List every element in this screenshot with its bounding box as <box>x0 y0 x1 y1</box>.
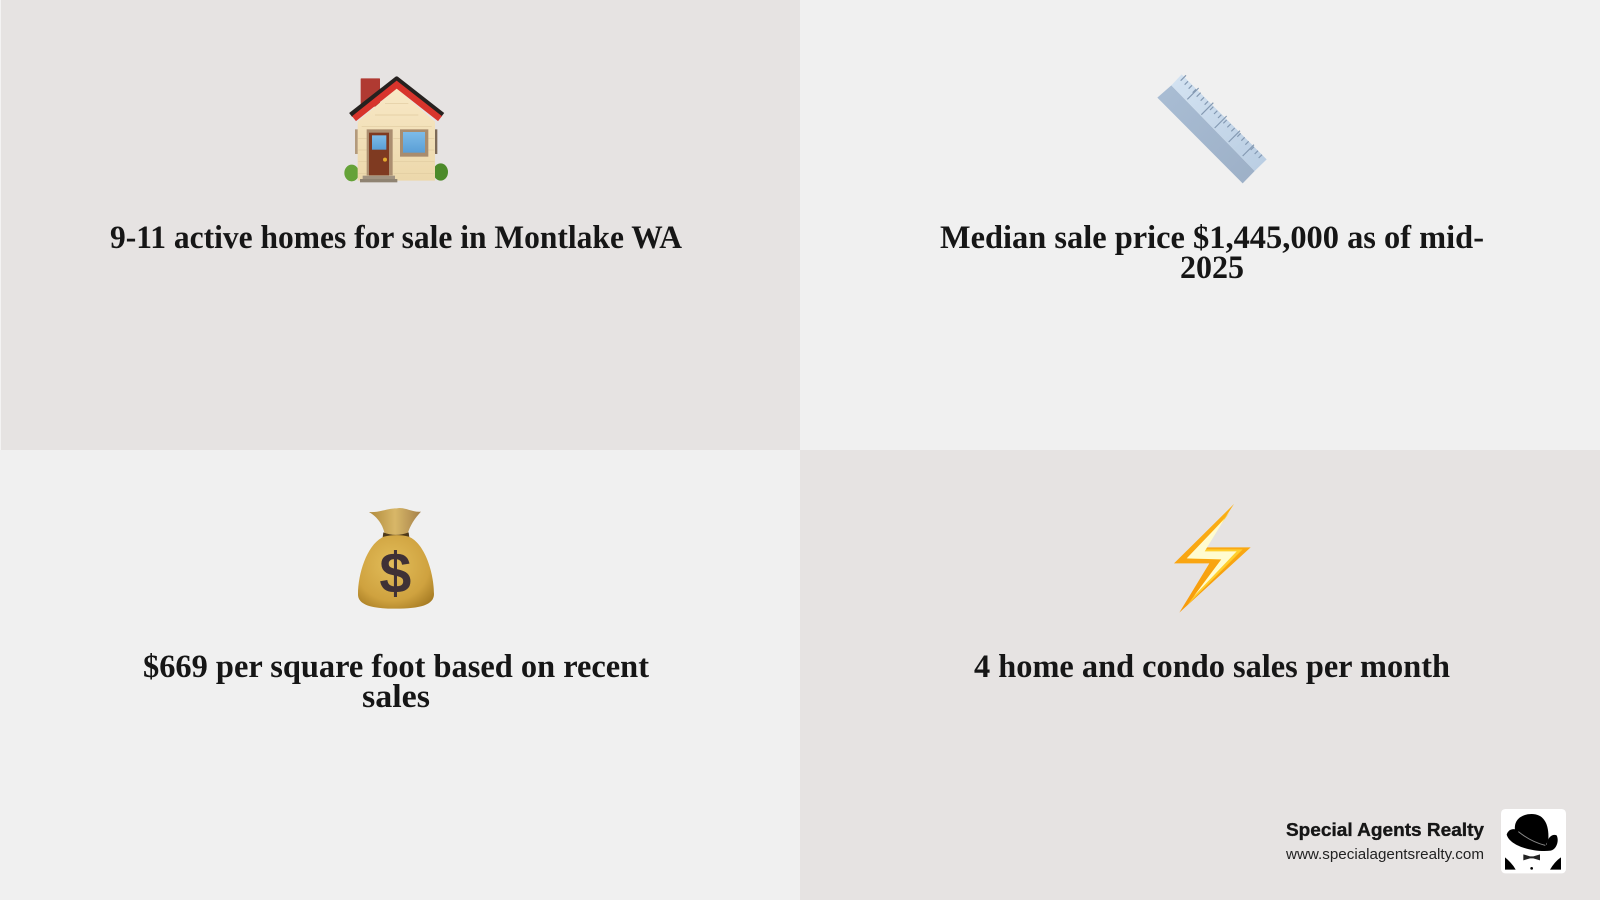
icon: money bag <box>358 508 434 609</box>
icon: house <box>344 78 448 182</box>
heading: price per square foot <box>143 649 649 715</box>
heading: median sale price: Median sale price $1,445,000 as of mid- <box>940 220 1484 256</box>
heading: median sale price: 2025 <box>1180 250 1244 286</box>
brand website: www.specialagentsrealty.com <box>1285 847 1484 863</box>
logo: bowler hat and bow tie <box>1501 809 1566 873</box>
heading: active homes: 9-11 active homes for sale in Montlake WA <box>110 220 682 256</box>
heading: monthly sales: 4 home and condo sales per month <box>974 649 1450 685</box>
panel: active homes <box>0 0 800 450</box>
panel: monthly sales <box>800 450 1600 900</box>
brand block <box>1285 809 1566 873</box>
heading: price per square foot: $669 per square foot based on recent <box>143 649 649 685</box>
panel: price per square foot <box>0 450 800 900</box>
icon: ruler <box>1157 74 1267 183</box>
panel: median sale price <box>800 0 1600 450</box>
heading: median sale price <box>940 220 1484 286</box>
brand name: Special Agents Realty <box>1286 819 1485 840</box>
icon: money bag: $ <box>379 541 411 605</box>
icon: lightning bolt <box>1174 504 1251 613</box>
heading: price per square foot: sales <box>362 679 430 715</box>
